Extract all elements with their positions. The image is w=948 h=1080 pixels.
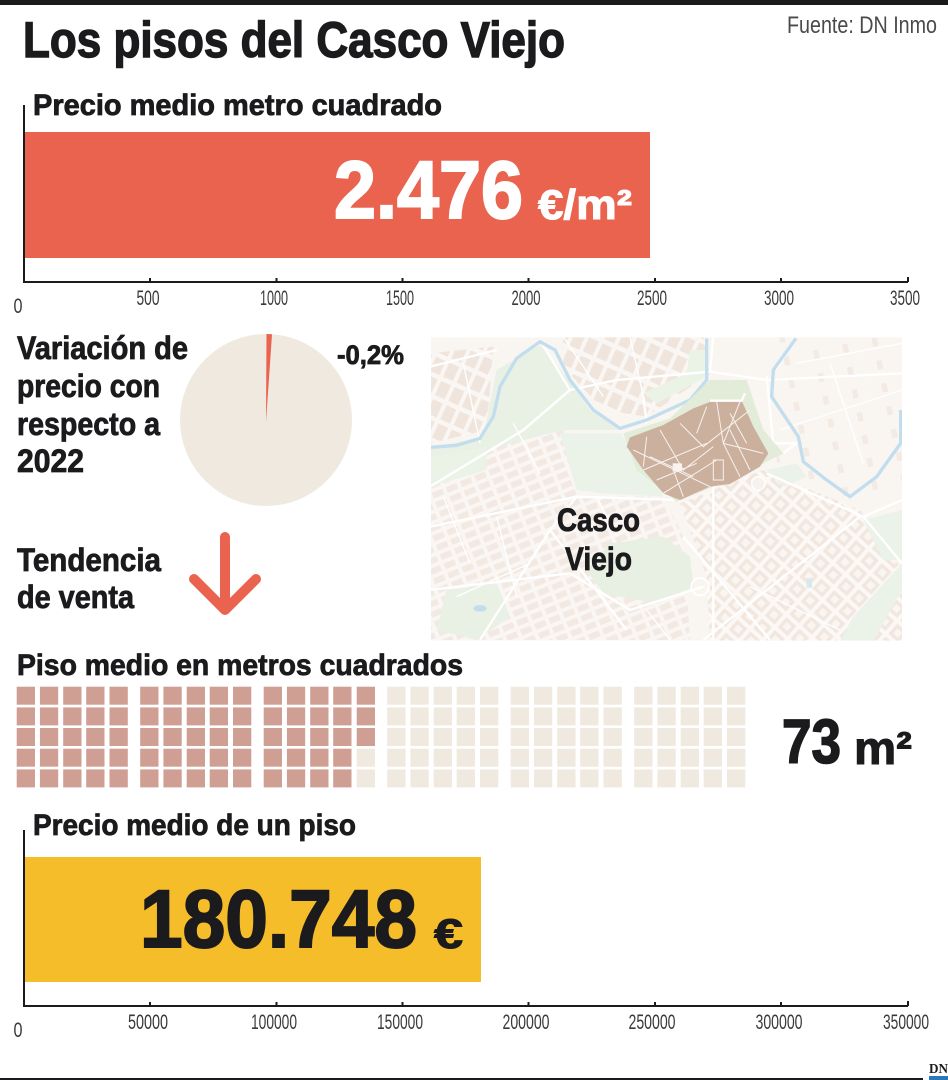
heading: precio medio de un piso: Precio medio de un piso: [33, 809, 356, 842]
axis labels: 150000: [377, 1011, 423, 1034]
axis labels: 0: [14, 1019, 22, 1042]
axis labels: 300000: [756, 1011, 802, 1034]
heading: piso medio en metros cuadrados: Piso medio en metros cuadrados: [17, 649, 463, 682]
green areas: [430, 345, 620, 463]
map label: Casco Viejo: [557, 502, 640, 577]
axis lines and ticks: [24, 105, 908, 282]
old town streets: [633, 402, 763, 497]
axis labels: 250000: [628, 1011, 676, 1034]
axis labels: 500: [136, 287, 160, 310]
map label: Casco Viejo: Casco: [557, 502, 640, 538]
text: tendencia de venta: [17, 542, 161, 615]
icon: downward arrow: [194, 537, 256, 610]
axis labels: 200000: [502, 1011, 550, 1034]
map: Pamplona old town: [430, 337, 903, 641]
axis labels: 2000: [512, 287, 540, 310]
roads: [430, 337, 902, 640]
waffle chart: 73 of 150 m2: [16, 686, 746, 788]
value: 73 m2: m²: [854, 722, 912, 774]
panel: precio medio metro cuadrado: [14, 89, 920, 318]
bar: 180.748 euros: [24, 857, 481, 982]
citadel green belt: [623, 380, 783, 502]
text: variacion de precio: Variación de: [17, 330, 188, 366]
east sector: [777, 337, 903, 503]
bar value: 2.476: [334, 145, 523, 236]
axis labels: 3500: [890, 287, 920, 310]
text: variacion de precio: [17, 330, 188, 479]
value: 73 m2: 73: [782, 708, 841, 777]
rivers: [431, 338, 707, 447]
text: tendencia de venta: de venta: [17, 579, 134, 615]
axis lines and ticks: [24, 830, 908, 1006]
value: 73 m2: [782, 708, 912, 777]
axis labels: 1000: [260, 287, 288, 310]
west blocks: [430, 430, 690, 640]
bar value: €: [434, 910, 463, 957]
north blocks: [563, 337, 710, 417]
text: variacion de precio: precio con: [17, 368, 160, 404]
axis labels: [14, 287, 920, 318]
bar value: 180.748: [140, 874, 417, 965]
text: tendencia de venta: Tendencia: [17, 542, 161, 578]
axis labels: [14, 1011, 929, 1042]
axis labels: 50000: [128, 1011, 168, 1034]
axis labels: 3000: [764, 287, 794, 310]
bar value: [334, 145, 632, 236]
axis labels: 1500: [386, 287, 414, 310]
pie label: -0,2%: [337, 340, 404, 370]
text: variacion de precio: respecto a: [17, 406, 160, 442]
bar value: €/m²: [538, 181, 632, 228]
title: Los pisos del Casco Viejo: [23, 12, 565, 68]
axis labels: 100000: [251, 1011, 297, 1034]
bottom rule: [0, 1078, 923, 1080]
text: variacion de precio: 2022: [17, 443, 84, 479]
panel: precio medio de un piso: [14, 809, 929, 1042]
map label: Casco Viejo: Viejo: [565, 541, 632, 577]
heading: precio medio metro cuadrado: Precio medio metro cuadrado: [33, 89, 442, 122]
old town blocks: [627, 401, 768, 500]
bar: 2.476 euros per square metre: [24, 132, 650, 258]
pie chart: -0,2%: [180, 334, 352, 506]
axis labels: 0: [14, 295, 22, 318]
top black rule: [0, 0, 948, 5]
north-west blocks: [430, 347, 493, 443]
ensanche grid: [680, 470, 902, 641]
axis labels: 2500: [637, 287, 667, 310]
